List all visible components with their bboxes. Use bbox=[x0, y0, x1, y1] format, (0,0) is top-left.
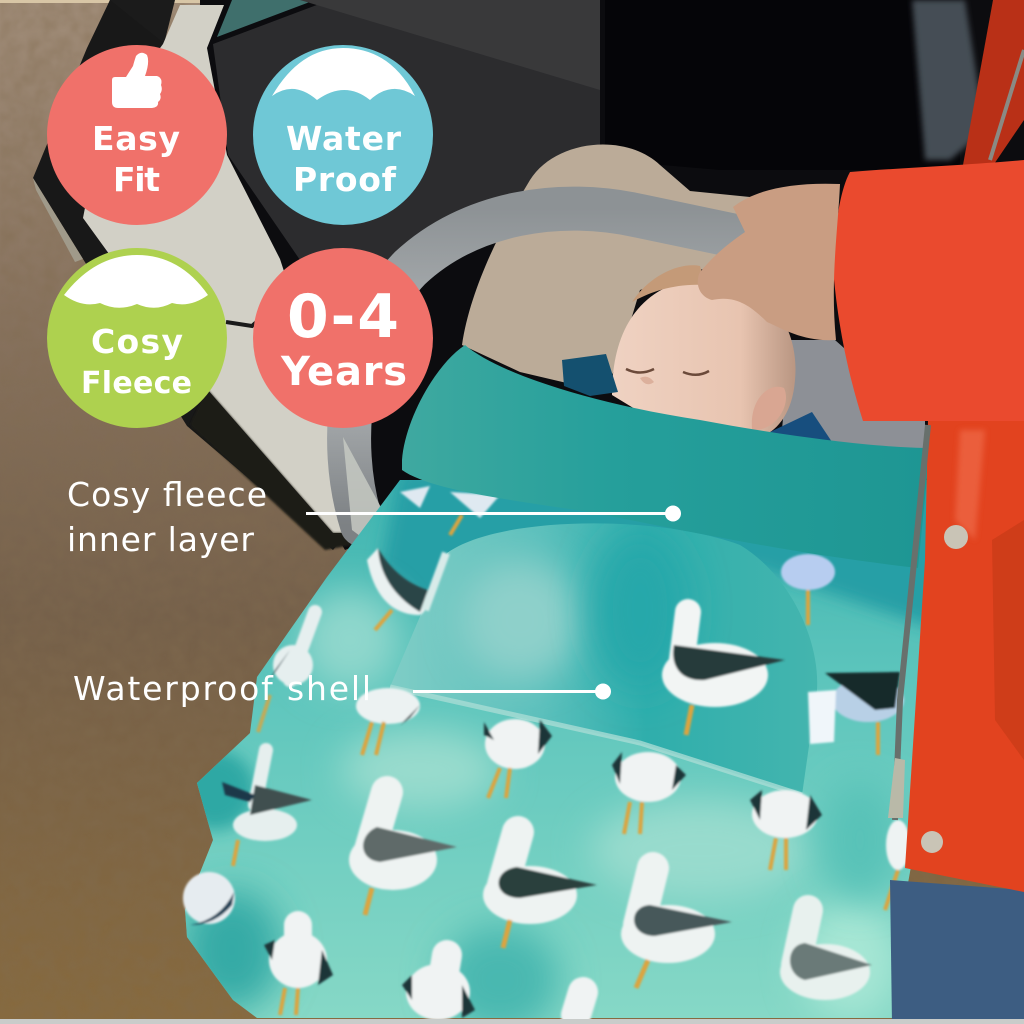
seagulls bottom row bbox=[183, 872, 583, 1020]
seagull on flap bbox=[662, 612, 785, 735]
badge: Easy Fit bbox=[47, 45, 227, 225]
seagulls upper left bbox=[258, 486, 500, 755]
photo: red coat and denim bbox=[833, 0, 1024, 1024]
badge: Water Proof bbox=[253, 45, 433, 225]
badge: Cosy Fleece: Cosy bbox=[91, 322, 183, 361]
bottom edge strip bbox=[0, 1019, 1024, 1024]
seagull lower left bbox=[349, 792, 457, 915]
badge: 0-4 Years: Years bbox=[280, 349, 407, 395]
badge: Easy Fit: Fit bbox=[113, 160, 160, 199]
callout: waterproof shell bbox=[73, 669, 611, 708]
badge: 0-4 Years bbox=[253, 248, 433, 428]
photo: car interior bbox=[200, 0, 1024, 550]
seagull lower centre bbox=[483, 832, 597, 948]
icon: umbrella bbox=[272, 48, 415, 100]
icon: fleece cloud bbox=[64, 255, 208, 308]
callout: cosy fleece inner layer: inner layer bbox=[67, 520, 254, 559]
photo: car seat beige liner bbox=[462, 144, 925, 452]
seagull far right bbox=[780, 910, 872, 1000]
photo: teal fleece collar bbox=[402, 345, 930, 568]
photo: hand on handle bbox=[698, 184, 840, 340]
callout: cosy fleece inner layer: Cosy fleece bbox=[67, 475, 267, 514]
seagull at left fold bbox=[222, 750, 312, 866]
photo: waterproof seagull shell bbox=[175, 470, 940, 1024]
badge: Water Proof: Proof bbox=[293, 160, 397, 199]
badge: Cosy Fleece: Fleece bbox=[81, 366, 192, 401]
photo: open car door bbox=[33, 0, 352, 550]
photo: seagull pattern bbox=[183, 486, 910, 1020]
photo: front pocket flap bbox=[390, 523, 817, 795]
seagulls under flap seam bbox=[484, 719, 822, 870]
badge: Easy Fit: Easy bbox=[92, 119, 180, 158]
photo: baby head bbox=[562, 265, 832, 442]
callout: cosy fleece inner layer bbox=[67, 475, 681, 559]
seagull lower right bbox=[621, 868, 732, 988]
badge: 0-4 Years: 0-4 bbox=[287, 282, 399, 352]
icon: thumbs up bbox=[112, 53, 162, 108]
badge: Water Proof: Water bbox=[286, 119, 402, 158]
badge: Cosy Fleece bbox=[47, 248, 227, 428]
seagulls upper right bbox=[781, 554, 910, 910]
brand label tag bbox=[808, 690, 836, 744]
photo: car seat handle bbox=[343, 209, 745, 545]
callout: waterproof shell: Waterproof shell bbox=[73, 669, 371, 708]
